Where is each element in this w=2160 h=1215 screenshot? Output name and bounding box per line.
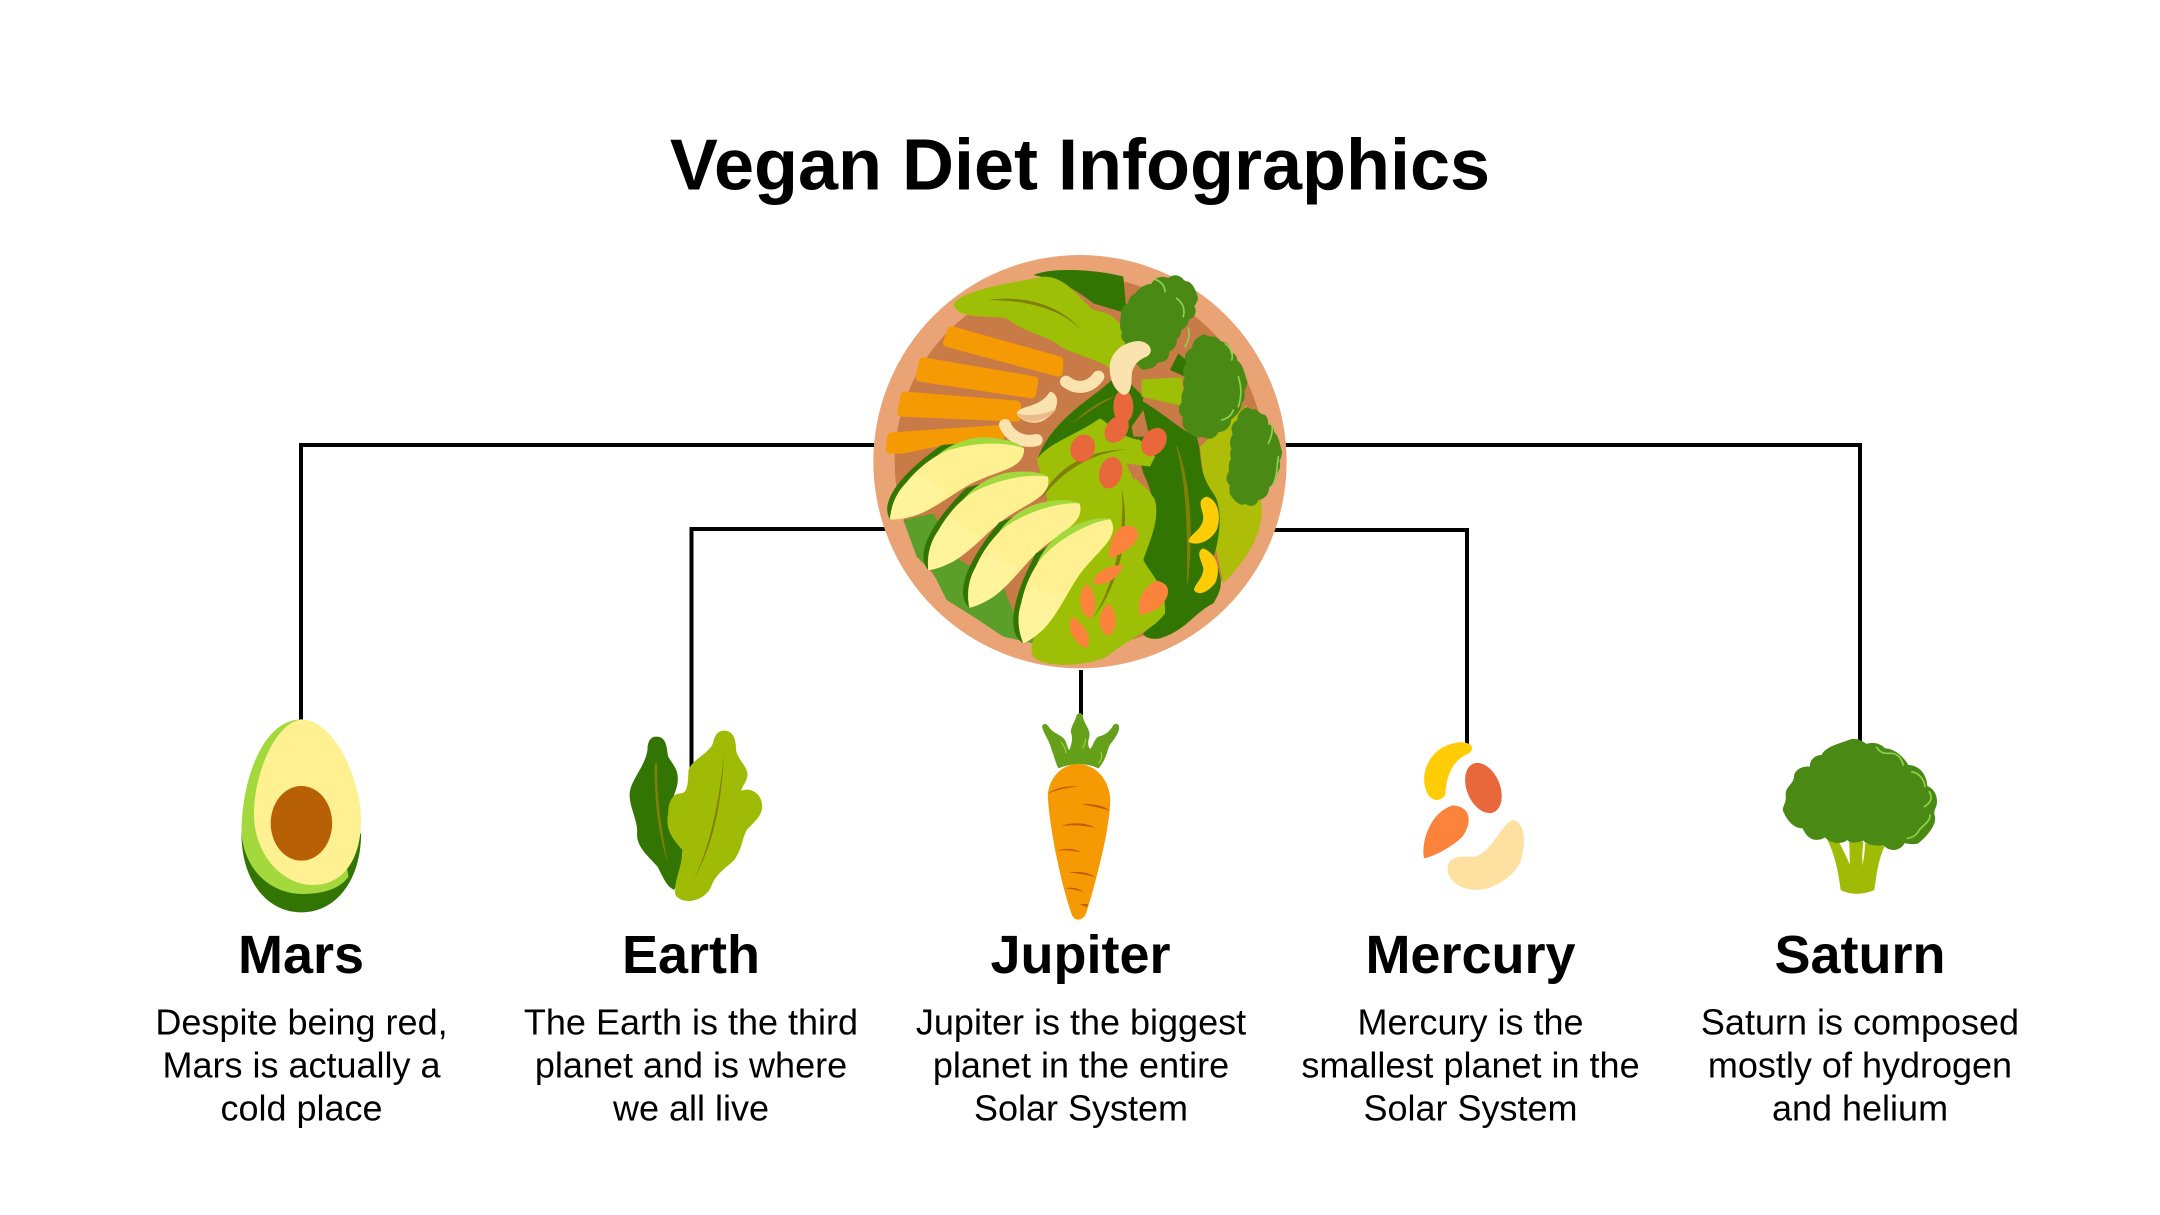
description: Mars: Despite being red,	[155, 1002, 448, 1042]
column: Mercury	[1301, 742, 1640, 1128]
bowl rim	[873, 255, 1287, 668]
bowl interior	[895, 276, 1265, 647]
carrot greens	[1042, 713, 1119, 768]
icon: lettuce leaves	[630, 731, 762, 901]
description: Mercury: smallest planet in the	[1301, 1044, 1640, 1086]
description: Mercury: Mercury is the	[1357, 1002, 1584, 1042]
column: Mars	[155, 719, 448, 1128]
connector lines	[301, 445, 1860, 770]
right olive leaf	[1200, 405, 1262, 583]
broccoli on bowl	[1102, 260, 1282, 506]
dark leaf vein	[1177, 447, 1190, 583]
description: Saturn: Saturn is composed	[1701, 1002, 2019, 1042]
description: Jupiter: Jupiter is the biggest	[916, 1002, 1246, 1042]
middle dark leaf	[1037, 373, 1143, 462]
red nuts	[1066, 390, 1172, 491]
yellow nuts	[1188, 497, 1219, 593]
small cashews on bowl	[1005, 377, 1098, 441]
top light leaf	[953, 277, 1128, 368]
title: Vegan Diet Infographics	[670, 126, 1490, 206]
avocado slices	[887, 437, 1143, 645]
description: Mars: cold place	[220, 1088, 383, 1128]
description: Mercury: Solar System	[1363, 1088, 1578, 1128]
heading: Saturn: Saturn	[1774, 925, 1946, 985]
top leaf vein	[988, 299, 1082, 331]
heading: Jupiter: Jupiter	[990, 925, 1171, 985]
description: Jupiter: planet in the entire	[933, 1044, 1229, 1086]
icon: carrot	[1042, 713, 1119, 920]
centre leaf vein	[1040, 449, 1127, 620]
top dark leaf	[1033, 270, 1127, 313]
broccoli stems on bowl	[1142, 353, 1190, 407]
icon: mixed nuts	[1423, 742, 1524, 890]
description: Saturn: and helium	[1772, 1088, 1948, 1128]
upper dark leaf vein	[1072, 396, 1117, 424]
icon: avocado	[241, 719, 361, 912]
broccoli highlights	[1155, 279, 1278, 485]
central salad bowl	[873, 255, 1287, 668]
description: Jupiter: Solar System	[974, 1088, 1188, 1128]
description: Earth: we all live	[612, 1088, 769, 1128]
description: Mars: Mars is actually a	[162, 1044, 442, 1086]
heading: Earth: Earth	[622, 925, 760, 985]
column: Earth	[524, 731, 858, 1128]
icon: broccoli	[1783, 739, 1937, 894]
main centre leaf	[1032, 418, 1165, 665]
carrot sticks	[890, 331, 1059, 449]
orange nuts	[1070, 526, 1168, 648]
description: Saturn: mostly of hydrogen	[1708, 1044, 2012, 1086]
lower green frill	[903, 513, 1067, 643]
heading: Mars: Mars	[238, 925, 364, 985]
column: Jupiter	[916, 713, 1246, 1128]
long dark leaf	[1138, 400, 1221, 639]
column: Saturn	[1701, 739, 2019, 1128]
brown gaps between leaves	[1127, 410, 1149, 481]
carrot body	[1048, 764, 1110, 920]
heading: Mercury: Mercury	[1365, 925, 1576, 985]
description: Earth: The Earth is the third	[524, 1002, 858, 1042]
description: Earth: planet and is where	[535, 1044, 847, 1086]
big cashew	[1110, 341, 1151, 395]
tan cashew	[1017, 392, 1057, 423]
